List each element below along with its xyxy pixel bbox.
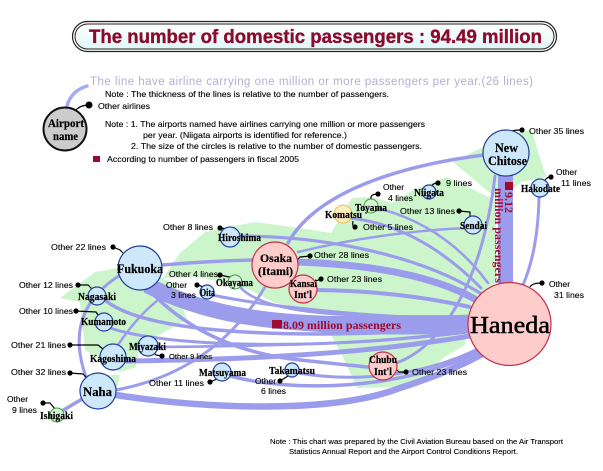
route: Takamatsu to Haneda	[299, 348, 480, 377]
airport: Sendai: Other 13 lines	[400, 206, 455, 216]
notes: According to number of passengers in fiscal 2005	[107, 154, 299, 164]
airport: Ishigaki	[7, 394, 73, 422]
airport: Kansai Int'l: Other 23 lines	[327, 274, 382, 284]
airport: Osaka (Itami)	[252, 242, 369, 288]
airport: Kagoshima: Other 21 lines	[11, 340, 66, 350]
airport: Fukuoka: Fukuoka	[117, 261, 163, 276]
route lines	[62, 155, 539, 411]
legend: airport symbol: name	[53, 129, 79, 143]
airport: Miyazaki	[129, 336, 212, 361]
route: Fukuoka to Osaka	[162, 260, 252, 265]
airport: Matsuyama: Other 11 lines	[149, 378, 204, 388]
route: Oita to Haneda	[212, 295, 468, 320]
airport: Takamatsu	[255, 363, 315, 396]
airport: Okayama: Okayama	[216, 278, 253, 289]
airport: Kumamoto	[19, 306, 126, 331]
airport: Kansai Int'l: Int'l	[294, 290, 312, 301]
airport: Sendai	[400, 206, 487, 234]
airport: Nagasaki: Nagasaki	[78, 292, 116, 303]
airport: Nagasaki: Other 12 lines	[19, 280, 73, 290]
airport: Toyama: 4 lines	[388, 193, 413, 203]
route: Fukuoka to Chubu	[147, 288, 375, 368]
airport: Nagasaki	[19, 280, 116, 305]
airport: Takamatsu: 6 lines	[261, 386, 286, 396]
airport: Osaka (Itami): (Itami)	[258, 264, 293, 278]
source note: Note : This chart was prepared by the Civil Aviation Bureau based on the Air Transport	[270, 437, 564, 446]
airport: Kagoshima: Kagoshima	[90, 354, 136, 365]
legend: airport symbol	[44, 86, 150, 150]
airport: Okayama	[169, 269, 253, 289]
airport: Niigata: 9 lines	[446, 178, 472, 188]
airport: Kumamoto: Other 10 lines	[19, 306, 73, 316]
airport: Naha: Naha	[83, 384, 112, 399]
airport: Komatsu: Other 5 lines	[363, 222, 413, 232]
map of Japan	[50, 130, 546, 422]
route: Hiroshima to Haneda	[240, 236, 480, 293]
airport: Toyama	[355, 182, 413, 214]
route: Kansai to Haneda	[316, 290, 470, 307]
airport: Miyazaki: Miyazaki	[129, 342, 166, 353]
route: Kagoshima to Osaka	[118, 295, 165, 345]
airport: Hiroshima: Hiroshima	[218, 233, 261, 244]
airport: New Chitose: Other 35 lines	[529, 126, 584, 136]
route: Ishigaki to Naha	[62, 399, 82, 411]
airport: Matsuyama: Matsuyama	[199, 368, 246, 379]
notes: per year. (Niigata airports is identified for reference.)	[143, 130, 347, 140]
airport: Komatsu: Komatsu	[325, 210, 362, 221]
airport: Sendai: Sendai	[460, 221, 487, 232]
notes	[93, 89, 425, 164]
airport: Ishigaki: Other	[7, 394, 28, 404]
airport: Matsuyama	[149, 363, 246, 388]
source note	[270, 437, 564, 456]
airport: Kumamoto: Kumamoto	[81, 317, 126, 328]
route: Nagasaki to Haneda	[106, 301, 468, 334]
airport: New Chitose: Chitose	[488, 153, 527, 168]
airport: Chubu Int'l	[369, 352, 467, 380]
passenger label: 9.12 million: million passengers	[492, 188, 506, 283]
airport: Ishigaki: 9 lines	[12, 405, 37, 415]
route: Hakodate to Haneda	[523, 197, 539, 285]
airport: Hakodate: 11 lines	[561, 178, 591, 188]
airport: Fukuoka: Other 22 lines	[51, 242, 106, 252]
airport: Takamatsu: Other	[255, 376, 276, 386]
route: Fukuoka to Haneda, 8.09 million	[147, 285, 475, 325]
airport: Niigata	[414, 178, 472, 199]
route: Kumamoto to Haneda	[110, 328, 468, 344]
passenger label: 9.12 million: 9.12	[502, 192, 516, 213]
airport: Osaka (Itami): Other 28 lines	[314, 250, 369, 260]
route: Miyazaki to Haneda	[158, 330, 468, 347]
airport: Komatsu	[325, 205, 413, 232]
airport: Oita: Other	[166, 280, 187, 290]
airport: Okayama: Other 4 lines	[169, 269, 218, 279]
airport: Haneda: Haneda	[470, 313, 550, 339]
airport: Hakodate: Hakodate	[521, 184, 561, 195]
route: Toyama to Haneda	[377, 208, 488, 283]
airport: Hakodate: Other	[556, 167, 577, 177]
airport: Fukuoka	[51, 242, 163, 290]
route: New Chitose to Chubu	[396, 176, 495, 363]
route: Naha to Osaka	[116, 287, 265, 390]
airport: Oita: 3 lines	[171, 290, 196, 300]
airport: Ishigaki: Ishigaki	[40, 411, 73, 422]
legend: airport symbol: Other airlines	[98, 101, 150, 111]
airport: Haneda: 31 lines	[554, 290, 584, 300]
airport: New Chitose	[483, 126, 584, 176]
route: New Chitose to Haneda, 9.12 million	[498, 170, 513, 290]
notes: 2. The size of the circles is relative to the number of domestic passengers.	[131, 141, 422, 151]
airport: Kansai Int'l: Kansai	[290, 279, 317, 290]
airport: Niigata: Niigata	[414, 188, 444, 199]
legend: airport symbol: Airport	[48, 116, 84, 130]
source note: Statistics Annual Report and the Airport Control Conditions Report.	[289, 447, 518, 456]
airport: Toyama: Other	[383, 182, 404, 192]
airport: Miyazaki: Other 9 lines	[169, 352, 212, 361]
airport: Haneda	[468, 279, 584, 366]
route: Kagoshima to Haneda	[120, 336, 470, 361]
route: Fukuoka to Kansai	[155, 293, 468, 333]
title: The number of domestic passengers : 94.49 million	[89, 26, 542, 48]
passenger label: 8.09 million: 8.09 million passengers	[283, 318, 401, 332]
airport: Chubu Int'l: Int'l	[374, 367, 392, 378]
airport: Toyama: Toyama	[355, 203, 387, 214]
airport: Chubu Int'l: Other 23 lines	[412, 367, 467, 377]
legend heading: line explanation: The line have airline carrying one million or more passengers per year.(26 lines)	[90, 76, 533, 88]
airport: New Chitose: New	[495, 140, 519, 155]
route: Sendai to Osaka	[298, 228, 466, 252]
airport: Kagoshima	[11, 340, 136, 370]
airport: Takamatsu: Takamatsu	[269, 366, 315, 377]
airport: Oita: Oita	[200, 288, 215, 299]
airport: Naha: Other 32 lines	[11, 367, 66, 377]
route: Naha to Fukuoka	[79, 274, 122, 377]
route: Naha to Haneda	[116, 353, 484, 406]
route: Osaka to Haneda	[297, 262, 480, 302]
route: Okayama to Haneda	[240, 287, 468, 316]
airport: Hakodate	[521, 167, 591, 197]
route: Matsuyama to Haneda	[230, 350, 482, 386]
route: Komatsu to Haneda	[350, 218, 481, 288]
airport: Naha	[11, 367, 116, 409]
notes: Note : 1. The airports named have airlines carrying one million or more passengers	[105, 119, 425, 129]
airport: Chubu Int'l: Chubu	[369, 355, 397, 366]
airport: Hiroshima	[163, 222, 261, 247]
airport: Kansai Int'l	[289, 274, 382, 303]
notes: Note : The thickness of the lines is relative to the number of passengers.	[105, 89, 389, 99]
airport: Osaka (Itami): Osaka	[260, 251, 292, 265]
airport: Hiroshima: Other 8 lines	[163, 222, 213, 232]
passenger label: 9.12 million	[492, 182, 516, 283]
airport: Haneda: Other	[549, 279, 570, 289]
route: New Chitose to Osaka	[288, 155, 484, 243]
airport: Oita	[166, 280, 215, 300]
